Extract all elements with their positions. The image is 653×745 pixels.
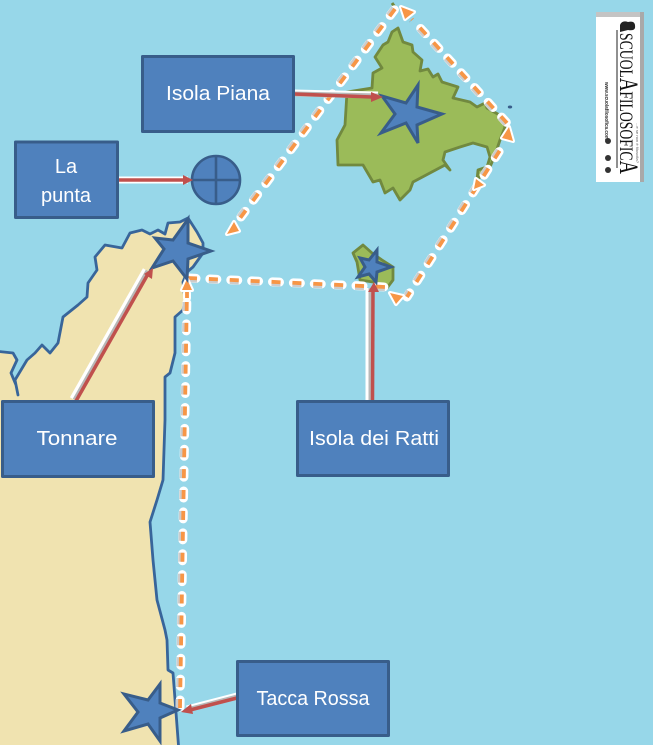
islet east (508, 106, 512, 108)
route arrowhead north (401, 7, 414, 19)
marker: La punta (192, 156, 240, 204)
label box: Isola dei Ratti: Isola dei Ratti (309, 428, 439, 450)
star: Tonnare (152, 219, 211, 279)
star: Tacca Rossa (124, 684, 178, 741)
label box: Tonnare (2, 402, 154, 476)
route arrowhead east (502, 127, 513, 141)
label box: Tacca Rossa: Tacca Rossa (256, 688, 370, 710)
route arrowhead Ratti (390, 293, 403, 304)
islet tip north (392, 3, 397, 10)
label box: Tonnare: Tonnare (36, 428, 118, 450)
label box: La punta: La (55, 156, 78, 178)
logo title: SCUOL A FILOSOFIC A (614, 33, 643, 175)
pointer halo shadows (73, 93, 378, 710)
label box: La punta: punta (41, 185, 92, 207)
label box: La punta (16, 142, 118, 218)
route arrowhead La punta (227, 222, 239, 234)
arrow: Isola Piana (294, 92, 383, 102)
logo rule (616, 30, 618, 168)
logo head silhouette (620, 21, 635, 32)
label box: Isola Piana (142, 56, 294, 132)
island: Isola Piana (337, 28, 505, 200)
logo tagline: ...e se non è filosofia? (635, 123, 640, 164)
label box: Isola Piana: Isola Piana (166, 83, 271, 105)
star: Isola dei Ratti (358, 250, 391, 282)
logo url: www.scuolafilosofica.com (603, 81, 609, 140)
mainland coast (0, 218, 203, 745)
arrow: Tacca Rossa (181, 698, 237, 714)
logo social icons (605, 138, 611, 173)
arrow: Isola dei Ratti (368, 282, 379, 401)
logo: Scuola Filosofica (596, 12, 644, 182)
arrow: Tonnare (76, 268, 153, 401)
star: Isola Piana (381, 85, 442, 143)
arrow: La punta (118, 175, 193, 185)
route: dashed navigation line (178, 7, 513, 708)
island: Isola dei Ratti (353, 245, 393, 288)
route arrowhead north coast (182, 279, 192, 290)
label box: Tacca Rossa (238, 662, 388, 736)
route arrowhead mid (474, 179, 484, 189)
label box: Isola dei Ratti (298, 402, 448, 476)
